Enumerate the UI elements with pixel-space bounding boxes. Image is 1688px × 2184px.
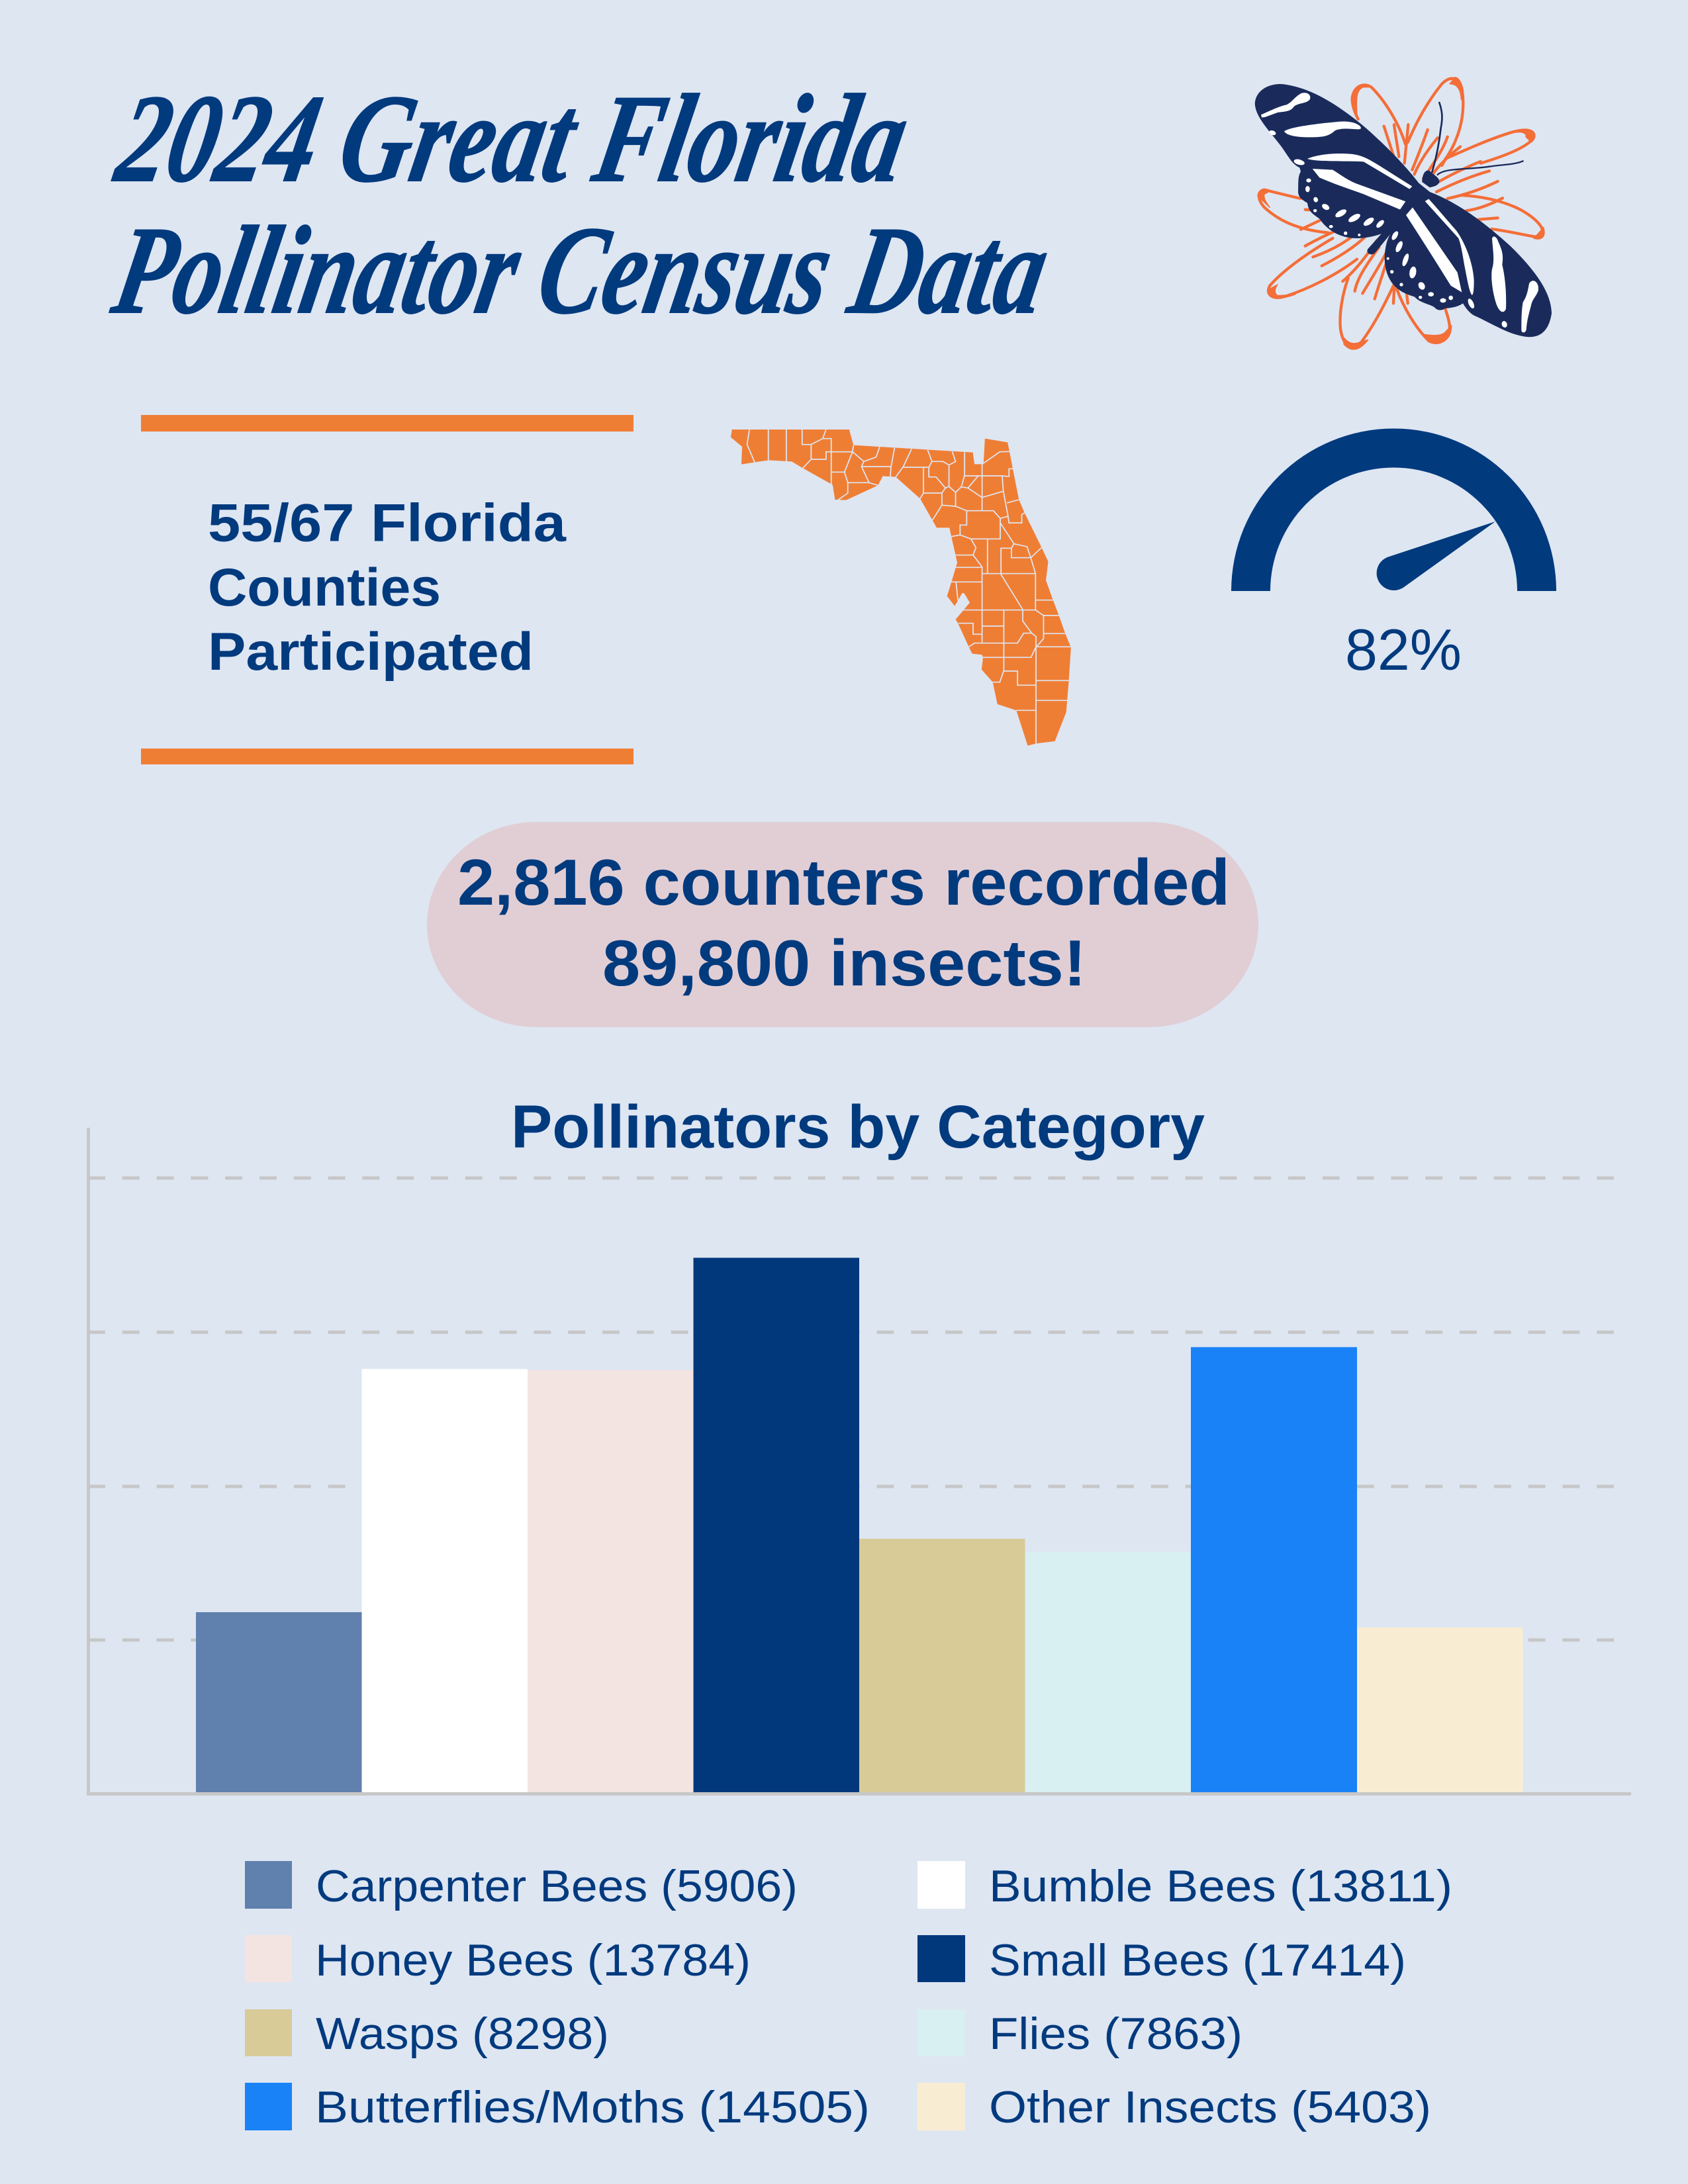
gauge value: 82% (1345, 617, 1462, 682)
text: counties participated (208, 494, 567, 682)
callout text: 2,816 counters recorded (457, 846, 1230, 919)
callout text (457, 846, 1230, 999)
text: counties participated: Participated (208, 622, 534, 682)
legend item: flies: Flies (7863) (989, 2009, 1243, 2059)
bar: small bees (694, 1257, 859, 1792)
title (103, 69, 1059, 340)
legend item: other insects: Other Insects (5403) (989, 2082, 1431, 2132)
map: Florida counties (731, 430, 1071, 746)
bar: carpenter bees (196, 1612, 361, 1792)
text: counties participated: 55/67 Florida (208, 494, 567, 553)
bar: honey bees (528, 1370, 694, 1792)
panel: counties participated (141, 415, 633, 764)
bar: wasps (859, 1539, 1025, 1792)
legend item: bumble bees: Bumble Bees (13811) (989, 1861, 1452, 1911)
gauge needle (1377, 522, 1495, 590)
bar: flies (1025, 1552, 1191, 1792)
legend (245, 1861, 1452, 2132)
icon part: white wing stripes and spots (1261, 93, 1538, 332)
title: Pollinator Census Data (103, 201, 1059, 340)
icon: zebra longwing butterfly on flower (1255, 77, 1552, 349)
callout text: 89,800 insects! (602, 927, 1086, 999)
text: counties participated: Counties (208, 558, 441, 617)
legend item: honey bees: Honey Bees (13784) (315, 1935, 751, 1985)
legend item: wasps: Wasps (8298) (316, 2009, 609, 2059)
bar: other insects (1357, 1627, 1523, 1792)
icon part: antennae (1432, 103, 1523, 175)
title: 2024 Great Florida (106, 69, 919, 208)
icon part: orange flower (1258, 77, 1544, 349)
chart title: Pollinators by Category (511, 1093, 1205, 1161)
legend item: butterflies and moths: Butterflies/Moths (14505) (315, 2082, 870, 2132)
gauge: 82 percent (1231, 429, 1556, 682)
bar chart: pollinators by category (87, 1093, 1631, 1796)
icon part: navy butterfly wings and body (1255, 84, 1552, 337)
bar: butterflies and moths (1191, 1347, 1357, 1792)
callout: counters and insects (427, 822, 1258, 1027)
legend item: carpenter bees: Carpenter Bees (5906) (316, 1861, 798, 1911)
legend item: small bees: Small Bees (17414) (989, 1935, 1406, 1985)
bar: bumble bees (361, 1369, 528, 1792)
